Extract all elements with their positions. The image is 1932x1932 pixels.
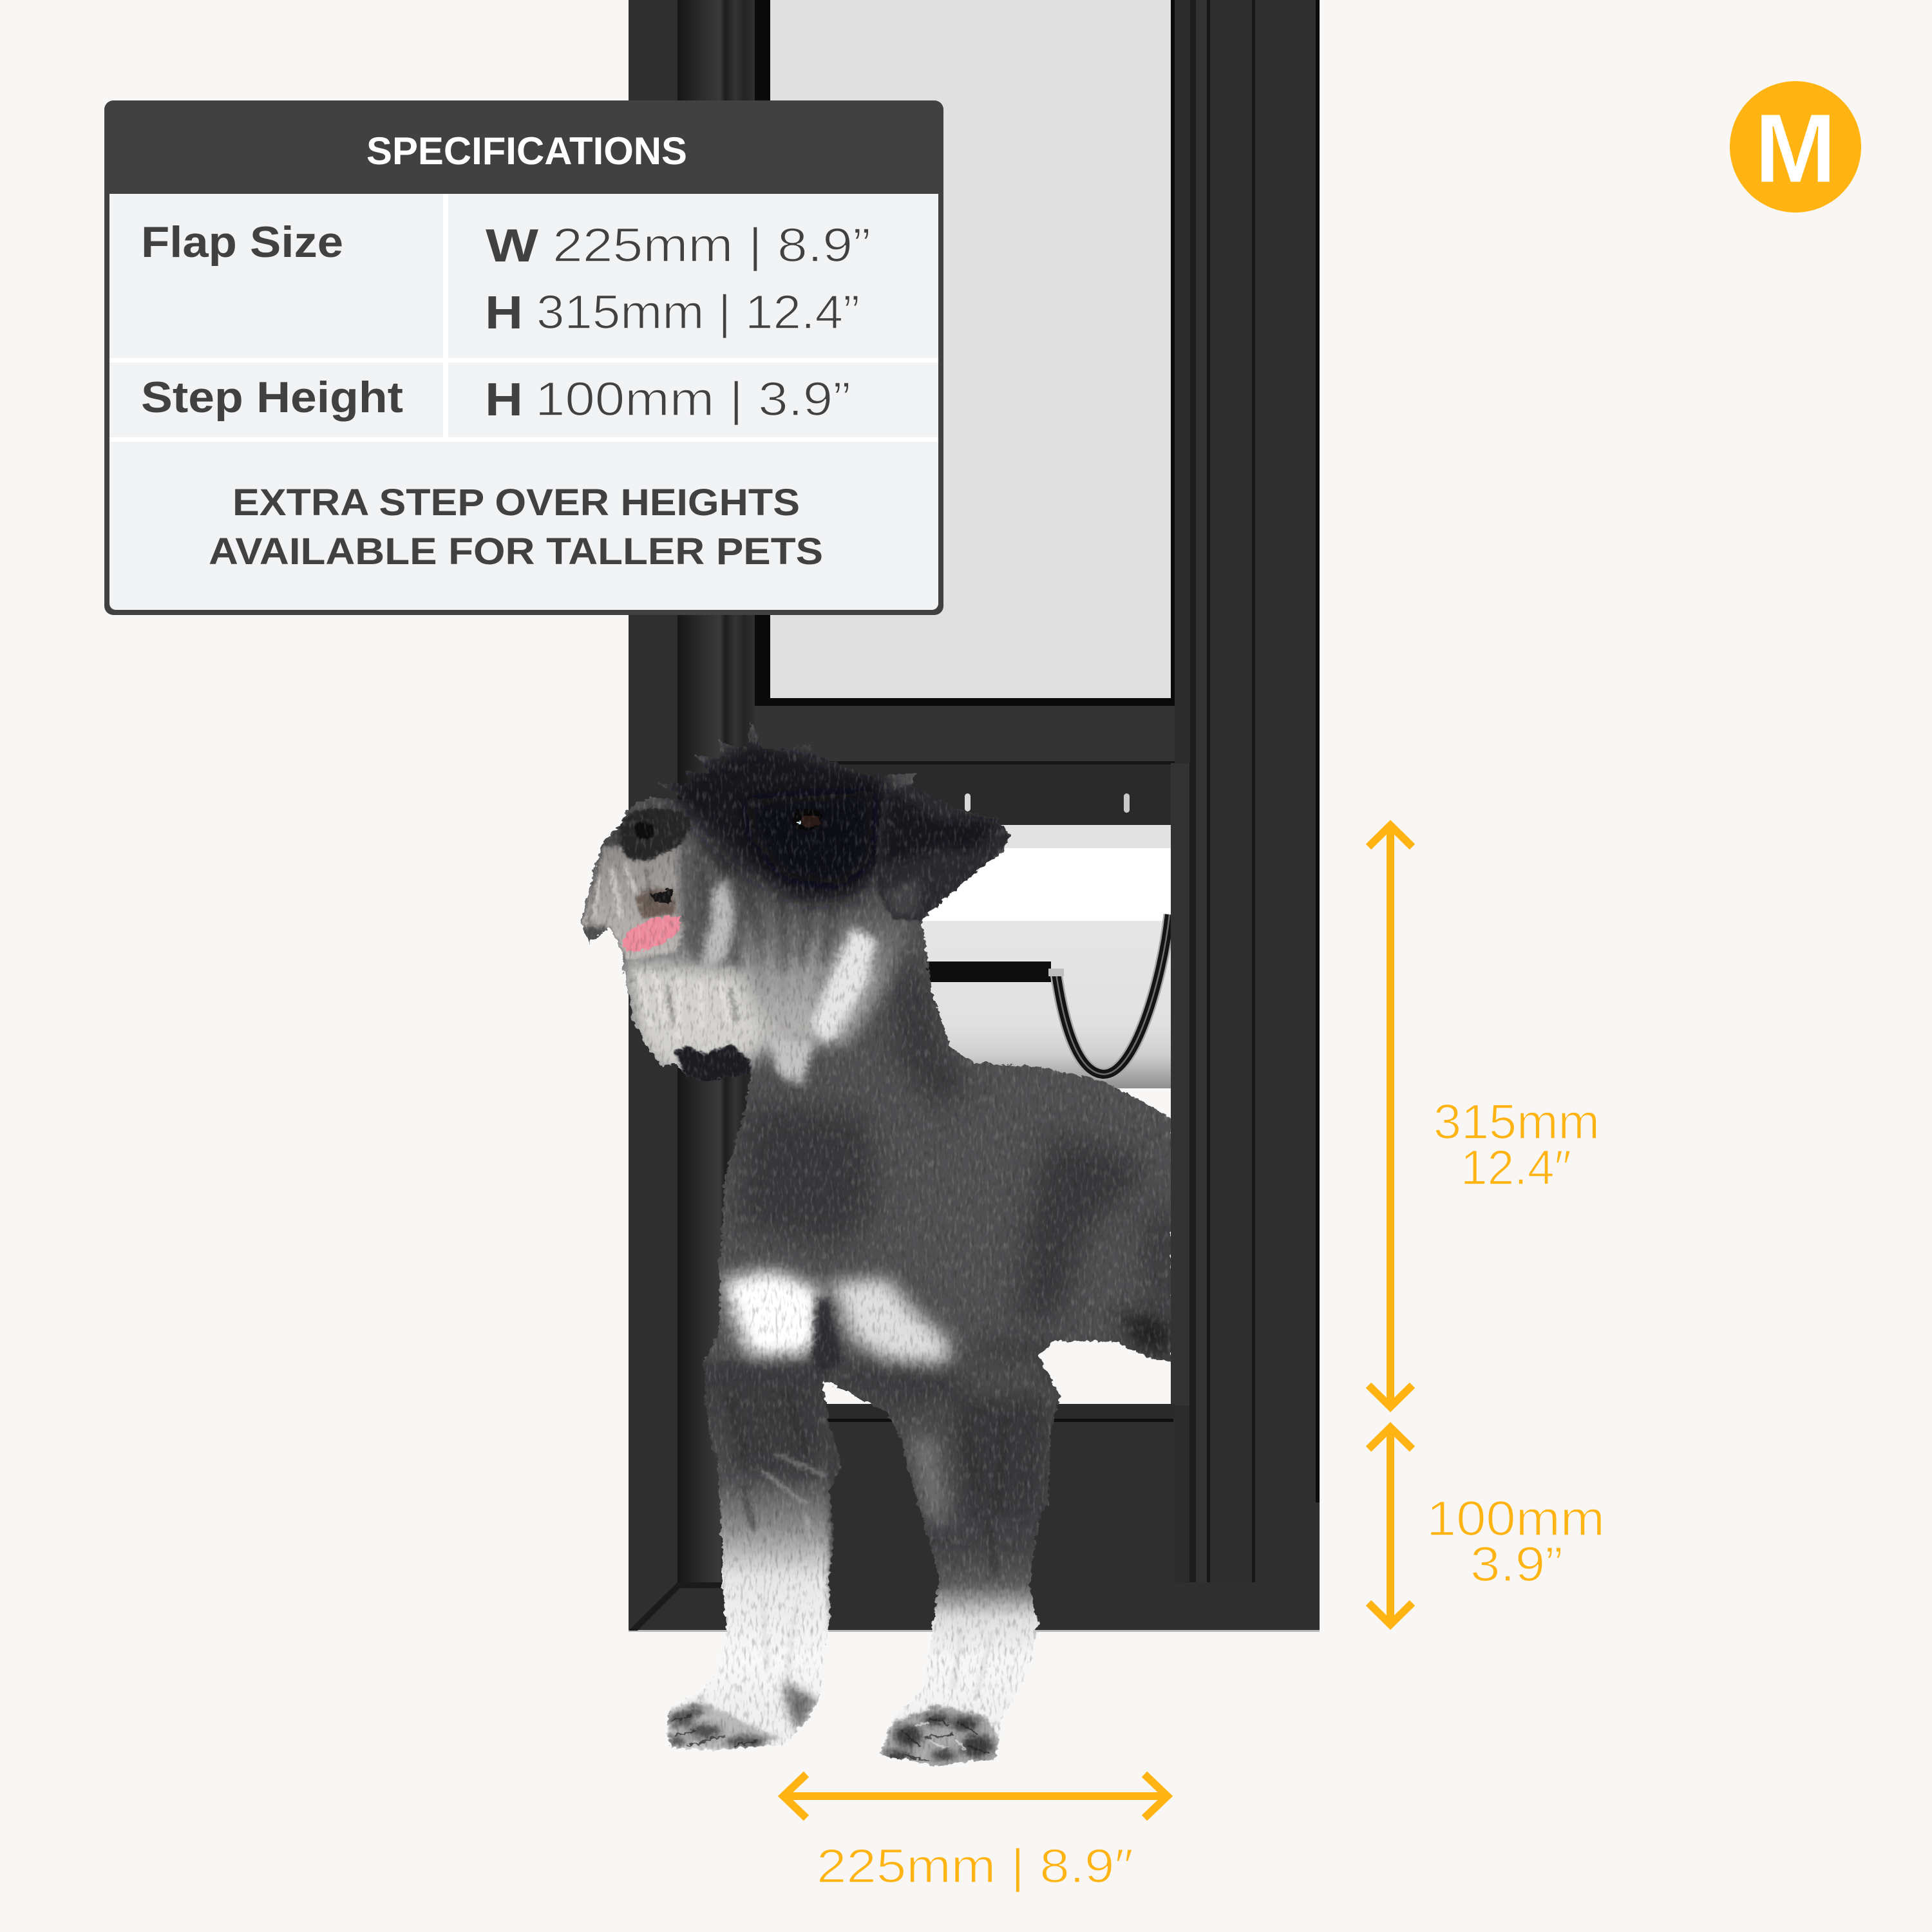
- ear: [875, 782, 1010, 920]
- beard light: [624, 963, 764, 1065]
- bottom mitred corner: [629, 1582, 755, 1631]
- step height label: 100mm: [1426, 1492, 1605, 1546]
- flap height label: [1434, 1095, 1600, 1195]
- dog lower body: [647, 1268, 1171, 1777]
- step height label: Step Height: [141, 373, 403, 422]
- right jamb mouldings: [1175, 0, 1320, 1582]
- table dividers: [109, 194, 938, 442]
- cheek grey: [677, 819, 743, 967]
- left channel moulding: [677, 0, 755, 1582]
- left paw: [663, 1679, 816, 1749]
- leg shading: [721, 1309, 1171, 1523]
- chin dark collar: [673, 1043, 750, 1082]
- step height label: 3.9”: [1470, 1537, 1563, 1592]
- muzzle whiskers: [579, 839, 690, 958]
- glass panel: [770, 0, 1171, 698]
- head black: [661, 737, 891, 901]
- flap height value: 315mm | 12.4”: [536, 285, 860, 339]
- flap bar: [755, 961, 1051, 982]
- note: AVAILABLE FOR TALLER PETS: [209, 531, 823, 573]
- nose: [620, 806, 688, 860]
- horizontal rail: [755, 706, 1175, 761]
- note: EXTRA STEP OVER HEIGHTS: [232, 482, 800, 524]
- width value: 225mm | 8.9”: [553, 218, 871, 272]
- body shadows: [735, 951, 1175, 1427]
- dog upper body: [567, 696, 1183, 1435]
- left chest patch: [721, 1268, 820, 1354]
- arrow: flap width: [783, 1774, 1167, 1818]
- glass gasket: [755, 0, 1175, 706]
- neck white patch: [809, 925, 875, 1043]
- flap hook left: [965, 793, 971, 811]
- arrow: flap height: [1368, 826, 1412, 1406]
- flap top bar: [755, 761, 1171, 825]
- step height value: H: [485, 374, 523, 426]
- pet door frame: [629, 0, 1320, 1632]
- fur strands: [587, 839, 834, 1037]
- flap lower lip: [755, 1404, 1173, 1419]
- flap height value: H: [485, 287, 523, 339]
- lower neck patch: [764, 1032, 813, 1084]
- right jamb cover: [1171, 763, 1196, 1582]
- size badge: [1730, 81, 1861, 213]
- flap size label: Flap Size: [141, 218, 343, 267]
- flap width label: 225mm | 8.9″: [817, 1839, 1133, 1893]
- eye: [791, 808, 820, 829]
- flap height label: 12.4″: [1461, 1141, 1571, 1195]
- flap opening: [755, 825, 1171, 1404]
- flap hook right: [1124, 793, 1130, 813]
- face grey: [616, 819, 908, 1070]
- left leg: [647, 1361, 830, 1776]
- flap pull cord: [1048, 914, 1170, 1074]
- chest centre shadow: [809, 1297, 842, 1371]
- step panel: [755, 1422, 1173, 1582]
- width value: W: [486, 220, 538, 272]
- note: [209, 482, 823, 573]
- size badge: M: [1754, 93, 1837, 204]
- flap height label: 315mm: [1434, 1095, 1600, 1150]
- step height label: [1426, 1492, 1605, 1592]
- leg fur strands: [728, 1392, 1004, 1691]
- right chest patch: [828, 1276, 947, 1363]
- mouth: [634, 887, 674, 918]
- step height value: 100mm | 3.9”: [535, 372, 851, 426]
- table body: [109, 194, 938, 610]
- dog photo: [567, 696, 1183, 1777]
- heading: SPECIFICATIONS: [366, 129, 687, 173]
- arrow: step height: [1368, 1427, 1412, 1624]
- right paw: [878, 1703, 997, 1765]
- specifications table: [104, 100, 943, 615]
- cheek light streak: [700, 872, 735, 967]
- tongue: [620, 914, 679, 950]
- right leg: [830, 1379, 1083, 1777]
- table frame and header: [104, 100, 943, 615]
